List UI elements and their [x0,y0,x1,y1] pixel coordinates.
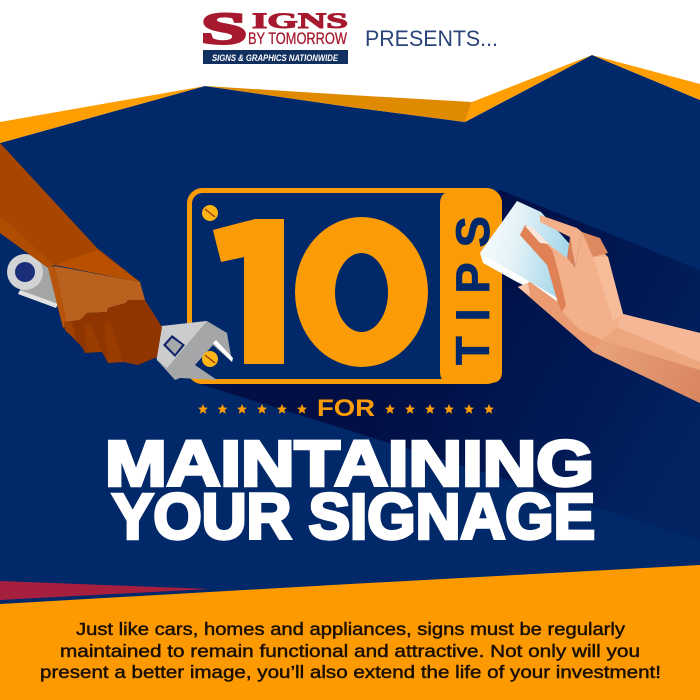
big number 10 [213,217,428,367]
big number 10: 0 [287,183,436,404]
icon: wrench [7,254,233,380]
logo: Signs By Tomorrow: S [201,4,247,53]
logo: Signs By Tomorrow: IGNS [252,8,348,33]
footer: red sliver [0,581,210,600]
presents label: PRESENTS... [365,26,498,51]
logo: Signs By Tomorrow [201,4,348,64]
footer: orange panel [0,565,700,700]
row of stars left [198,404,307,414]
icon: right arm and hand [518,215,700,403]
intro text block: maintained to remain functional and attractive. Not only will you [60,641,640,661]
title: MAINTAINING [105,428,594,500]
icon: top screw [202,205,218,221]
intro text block: Just like cars, homes and appliances, signs must be regularly [76,619,625,639]
icon: left arm and fist [0,143,162,365]
row of stars right [385,404,494,414]
big number 10: 1 [153,176,347,406]
icon: sponge [480,201,575,302]
title [105,428,595,552]
sign: frame and tips tab [190,190,502,383]
intro text block [40,619,661,682]
tips label: TIPS [446,216,499,365]
header band: orange ridge [0,55,700,143]
long shadow behind sign [200,190,700,540]
logo: Signs By Tomorrow: SIGNS & GRAPHICS NATIONWIDE [212,53,339,63]
logo: Signs By Tomorrow: BY TOMORROW [248,30,347,48]
title: YOUR SIGNAGE [112,480,595,552]
for label: FOR [317,395,375,422]
intro text block: present a better image, you’ll also extend the life of your investment! [40,662,661,682]
